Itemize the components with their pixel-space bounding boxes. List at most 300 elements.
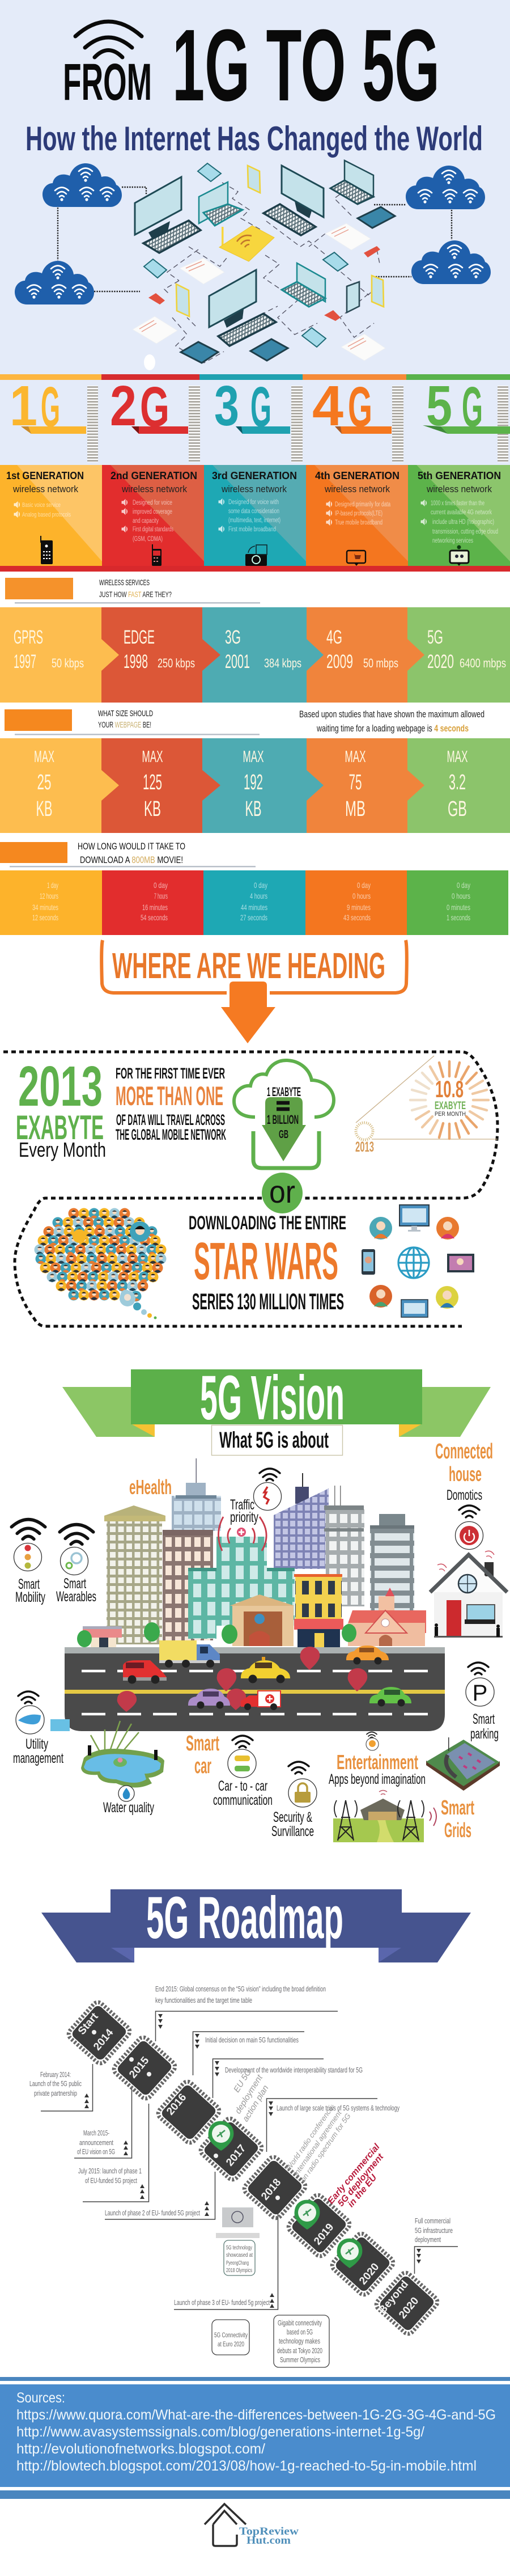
- card 1 text: wireless network: [12, 484, 78, 494]
- purple car: [188, 1689, 230, 1709]
- section header: webpage size: WHAT SIZE SHOULD: [98, 709, 153, 718]
- column 1 speeds: 1997: [14, 651, 36, 672]
- orange tab: [5, 578, 73, 599]
- milestone: February 2014: private partnership: [34, 2089, 77, 2097]
- generation logo 5G: 5: [426, 374, 452, 438]
- text block: more than one: FOR THE FIRST TIME EVER: [116, 1065, 225, 1082]
- milestone: initial decision: Initial decision on main 5G functionalities: [205, 2036, 299, 2044]
- rotated note: world radio conference: on radio spectrum for 5G: [299, 2112, 352, 2184]
- column 3 size: MAX: [243, 748, 264, 766]
- tower brown: [163, 1530, 213, 1640]
- column 3 size: KB: [245, 797, 262, 821]
- stat: 2013 exabyte: Every Month: [19, 1138, 106, 1161]
- item: connected house: house: [449, 1462, 482, 1486]
- person orange 2: [369, 1285, 392, 1308]
- column 3 time: 44 minutes: [241, 903, 267, 912]
- column 5 time: 1 seconds: [447, 913, 470, 922]
- red bar: [0, 566, 510, 572]
- parking lot: [426, 1737, 500, 1791]
- banner: 5G Roadmap: 5G Roadmap: [146, 1885, 343, 1951]
- badge: or: or: [269, 1174, 295, 1209]
- milestone: full commercial: [415, 2217, 453, 2244]
- reeds: [91, 1721, 139, 1750]
- item: smart parking: Smart: [473, 1711, 495, 1727]
- milestone: March 2015: [77, 2129, 115, 2156]
- green car: [369, 1687, 411, 1707]
- milestone: February 2014: Launch of the 5G public: [29, 2079, 82, 2088]
- chart: growth to 10.8 exabyte: 2013: [355, 1139, 374, 1155]
- road: [65, 1653, 445, 1731]
- column 1 speeds: 50 kbps: [52, 656, 84, 670]
- school: [345, 1588, 426, 1646]
- title: from: FROM: [63, 53, 152, 111]
- column 4 speeds: 4G: [326, 627, 342, 648]
- cloud outline: [234, 1060, 334, 1117]
- card 3 text: (multimedia, text, internet): [228, 517, 280, 524]
- item: smart car: Smart: [186, 1732, 219, 1756]
- stat: 2013 exabyte: EXABYTE: [16, 1109, 104, 1147]
- milestone: interoperability: Development of the worldwide interoperability standard for 5G: [225, 2066, 363, 2074]
- card 5 text: wireless network: [426, 484, 492, 494]
- generation logo 5G: G: [462, 375, 483, 439]
- icon: 3G device: [245, 545, 267, 566]
- item: utility management: management: [13, 1750, 63, 1766]
- farmhouse: [360, 1791, 405, 1820]
- card 3 text: wireless network: [221, 484, 287, 494]
- column 2 size: KB: [144, 797, 161, 821]
- item: entertainment: Entertainment: [337, 1750, 418, 1774]
- label box: what 5G is about: [212, 1426, 342, 1455]
- item: utility management: Utility: [26, 1736, 48, 1752]
- milestone: end 2015: [155, 1985, 326, 2004]
- generation logo 4G: 4: [312, 374, 343, 438]
- box: Euro 2020: [212, 2320, 249, 2355]
- column 1 size: KB: [36, 797, 52, 821]
- item: smart car: communication: [213, 1792, 273, 1808]
- card 5 text: 1000 x times faster than the: [431, 500, 484, 507]
- median: [65, 1690, 445, 1694]
- panel: sources: http://www.avasystemssignals.com/blog/generations-internet-1g-5g/: [16, 2424, 424, 2440]
- card 1 text: Basic voice service: [22, 502, 61, 509]
- illustration: road with cars: [65, 1640, 445, 1731]
- chart: growth to 10.8 exabyte: 10.8: [435, 1076, 464, 1102]
- illustration: smart city buildings: [77, 1458, 426, 1652]
- globe: [398, 1247, 429, 1278]
- logo: TopReviewHut: Hut.com: [246, 2535, 291, 2547]
- pond base: [81, 1749, 164, 1787]
- hard drives: [144, 163, 348, 347]
- icon: traffic priority: priority: [230, 1509, 258, 1525]
- icon: traffic priority: Traffic: [230, 1497, 254, 1513]
- cloud 1: [42, 163, 122, 207]
- card 3 text: First mobile broadband: [228, 526, 276, 533]
- chart: growth to 10.8 exabyte: EXABYTE: [435, 1100, 466, 1112]
- box: Tokyo 2020: Gigabit connectivity: [278, 2319, 322, 2327]
- person yellow: [436, 1286, 458, 1309]
- cloud 3: [406, 166, 485, 209]
- item: security and surveillance: [271, 1762, 317, 1839]
- lane dashes: [82, 1671, 428, 1714]
- column 1 time: 12 hours: [40, 891, 58, 900]
- column 1 time: [32, 881, 58, 922]
- table: download times: [0, 870, 508, 935]
- card 4 text: [315, 470, 400, 526]
- text block: more than one: [116, 1065, 226, 1143]
- box: Tokyo 2020: based on 5G: [287, 2328, 313, 2336]
- tower purple: [274, 1473, 329, 1569]
- tower teal: [188, 1537, 295, 1639]
- panel: generation stripes: [0, 374, 510, 380]
- chip labels: Start: [76, 2011, 101, 2037]
- chip labels: 2015: [127, 2054, 152, 2080]
- chip labels: 2016: [164, 2092, 189, 2117]
- chip labels: [76, 2011, 421, 2321]
- rotated note: EU 5G deployment action plan: EU 5G: [232, 2067, 253, 2094]
- generation logo 4G: G: [348, 375, 372, 439]
- generation logo 4G: [312, 374, 392, 439]
- rotated note: world radio conference: international agreement: [292, 2108, 343, 2177]
- house: [430, 1551, 507, 1638]
- documents: [133, 223, 385, 361]
- monitor: [400, 1205, 429, 1232]
- rotated note: early commercial deployment: in the EU: [346, 2173, 379, 2209]
- section header: webpage size: YOUR WEBPAGE BE!: [98, 720, 151, 730]
- column 5 speeds: 2020: [427, 651, 454, 672]
- column 4 speeds: 50 mbps: [363, 656, 398, 670]
- generation logo 1G: [10, 374, 86, 439]
- column 4 time: 43 seconds: [343, 913, 371, 922]
- column 4 time: [343, 881, 371, 922]
- item: security and surveillance: Security &: [273, 1809, 312, 1825]
- panel: sources: http://blowtech.blogspot.com/2013/08/how-1g-reached-to-5g-in-mobile.html: [16, 2458, 477, 2474]
- location pins: [117, 1647, 367, 1712]
- monitor 2: [264, 166, 324, 235]
- card 4 text: 4th GENERATION: [315, 470, 400, 481]
- left shop: [83, 1626, 122, 1652]
- chart: growth to 10.8 exabyte: [355, 1056, 498, 1155]
- document lines: [139, 227, 366, 349]
- dashed connectors: [164, 183, 380, 363]
- tower gray blue: [172, 1458, 221, 1531]
- heading: where are we heading: [101, 940, 407, 1043]
- illustration: crowd speech bubble: [34, 1208, 167, 1319]
- tower olive: [104, 1505, 165, 1644]
- stat: 2013 exabyte: [16, 1055, 106, 1161]
- panel: sources: http://evolutionofnetworks.blogspot.com/: [16, 2441, 265, 2457]
- stat: 2013 exabyte: 2013: [18, 1055, 103, 1118]
- card 5 text: 5th GENERATION: [418, 470, 501, 481]
- item: smart parking: P: [473, 1681, 487, 1706]
- column 5 time: [447, 881, 470, 922]
- column 3 speeds: 384 kbps: [264, 656, 301, 670]
- column 3 speeds: 2001: [225, 651, 250, 672]
- card 2 text: wireless network: [121, 484, 187, 494]
- person teal: [369, 1217, 392, 1240]
- text block: star wars: DOWNLOADING THE ENTIRE: [189, 1212, 346, 1234]
- box: PyeongChang: 5G technology: [226, 2244, 253, 2251]
- card 4 text: IP-based protocols(LTE): [335, 510, 382, 517]
- badge: or: [262, 1173, 303, 1213]
- arrow: [262, 1097, 306, 1161]
- item: smart car: car: [194, 1754, 211, 1778]
- banner: 5G Roadmap: [41, 1885, 471, 1962]
- column 4 time: 0 hours: [352, 891, 371, 900]
- ruler strips: [87, 386, 508, 462]
- column 2 time: 16 minutes: [142, 903, 168, 912]
- rule: [15, 734, 260, 735]
- milestone: end 2015: key functionalities and the target time table: [155, 1996, 252, 2004]
- text: THE GLOBAL MOBILE NETWORK: [116, 1126, 226, 1143]
- section header: download time: HOW LONG WOULD IT TAKE TO: [78, 841, 185, 852]
- icon: cloud download with exabyte: [234, 1060, 334, 1168]
- box: PyeongChang: showcased at: [226, 2252, 253, 2258]
- column 1 time: 34 minutes: [32, 903, 58, 912]
- column 5 size: MAX: [447, 748, 468, 766]
- card 3 text: some data consideration: [228, 508, 279, 515]
- ambulance: [241, 1691, 280, 1710]
- rotated note: EU 5G deployment action plan: [232, 2067, 271, 2124]
- icon: traffic priority: [230, 1469, 281, 1525]
- card 2 text: and capacity: [133, 518, 159, 524]
- rotated note: world radio conference: World radio conference:: [284, 2103, 336, 2172]
- timeline: roadmap: [29, 1985, 458, 2367]
- monitor 3: [209, 270, 276, 346]
- column 1 speeds: GPRS: [14, 627, 43, 648]
- laptop 3: [282, 263, 325, 307]
- rule: [10, 866, 256, 868]
- icon: cloud download with exabyte: GB: [279, 1128, 288, 1141]
- card 2 text: Designed for voice: [133, 500, 172, 506]
- item: smart grids: Smart: [441, 1796, 474, 1819]
- milestone: full commercial: Full commercial: [415, 2217, 450, 2225]
- icon: cloud download with exabyte: 1 EXABYTE: [267, 1085, 301, 1099]
- generation logo 2G: [110, 374, 188, 439]
- dotted connectors: [58, 187, 452, 291]
- rotated note: early commercial deployment: Early commercial: [326, 2142, 382, 2206]
- generation logo 3G: G: [250, 375, 271, 439]
- milestone: February 2014: February 2014:: [40, 2070, 71, 2079]
- item: smart car: [186, 1732, 273, 1808]
- column 1 speeds: [14, 627, 84, 672]
- sidewalk: [65, 1647, 445, 1654]
- column 5 time: 0 minutes: [447, 903, 470, 912]
- panel: sources: Sources:: [16, 2390, 65, 2406]
- column 4 size: [345, 748, 366, 821]
- item: utility management: [13, 1691, 70, 1766]
- orange tab: [0, 842, 67, 863]
- chip labels: 2014: [91, 2027, 116, 2053]
- column 5 size: 3.2: [449, 771, 466, 794]
- column 3 speeds: 3G: [225, 627, 241, 648]
- box: Euro 2020: 5G Connectivity: [214, 2331, 248, 2339]
- panel: header background: [0, 0, 510, 465]
- big burst: [410, 1061, 488, 1139]
- tower slate: [370, 1514, 414, 1613]
- text block: star wars: [189, 1212, 346, 1314]
- item: smart mobility: Mobility: [15, 1589, 45, 1605]
- milestone: phase 2: Launch of phase 2 of EU- funded 5G project: [105, 2209, 200, 2217]
- milestone: large scale trials: Launch of large scale trials of 5G systems & technology: [277, 2104, 400, 2112]
- item: entertainment: [329, 1732, 426, 1787]
- text: OF DATA WILL TRAVEL ACROSS: [116, 1111, 225, 1128]
- table: max webpage size: [0, 738, 510, 833]
- column 4 size: MB: [345, 797, 366, 821]
- chip labels: 2019: [312, 2222, 336, 2247]
- item: smart grids: [333, 1791, 474, 1842]
- milestone: March 2015: of EU vision on 5G: [77, 2147, 115, 2156]
- item: smart wearables: [56, 1525, 96, 1605]
- card 2 text: (GSM, CDMA): [133, 536, 163, 543]
- column 2 speeds: EDGE: [124, 627, 155, 648]
- taxi: [241, 1657, 290, 1683]
- water pipe: [50, 1719, 70, 1731]
- column 2 time: 0 day: [154, 881, 168, 890]
- box: Tokyo 2020: Summer Olympics: [280, 2355, 320, 2364]
- logo: TopReviewHut: [205, 2504, 299, 2547]
- card 1 text: [6, 470, 84, 518]
- monitor 1: [135, 177, 201, 253]
- icon: wifi title: [75, 22, 142, 57]
- milestone: February 2014: [29, 2070, 82, 2097]
- section header: download time: [0, 841, 256, 868]
- text: MORE THAN ONE: [116, 1081, 223, 1111]
- milestone: phase 3: Launch of phase 3 of EU- funded 5g project: [174, 2298, 270, 2307]
- tower gray: [324, 1486, 364, 1606]
- item: smart car: Car - to - car: [218, 1778, 267, 1794]
- logo: TopReviewHut: TopReview: [239, 2526, 299, 2537]
- box: PyeongChang: 2018 Olympics: [226, 2267, 252, 2274]
- banner: 5G Vision: [62, 1363, 491, 1437]
- title: [63, 9, 440, 122]
- column 4 time: 0 day: [357, 881, 371, 890]
- small burst: [356, 1123, 373, 1140]
- tablet pink: [447, 1254, 474, 1272]
- column 1 size: [34, 748, 54, 821]
- icon: 2G phone: [152, 544, 162, 566]
- item: smart wearables: Wearables: [56, 1589, 96, 1605]
- diagram: network of devices: [15, 160, 491, 370]
- icon: 4G shopping: [347, 551, 366, 566]
- milestone: full commercial: deployment: [415, 2235, 441, 2244]
- white dot: [144, 354, 155, 370]
- generation logo 2G: G: [140, 375, 169, 439]
- card 2 text: First digital standards: [133, 526, 173, 533]
- column 2 size: MAX: [142, 748, 163, 766]
- item: smart mobility: Smart: [18, 1576, 40, 1592]
- box: Tokyo 2020: debuts at Tokyo 2020: [277, 2346, 322, 2355]
- chip labels: 2020: [357, 2261, 381, 2287]
- column 1 size: MAX: [34, 748, 54, 766]
- card 2 text: improved coverage: [133, 509, 172, 515]
- arrow: [221, 982, 275, 1043]
- truck: [159, 1640, 220, 1668]
- laptop screen: [401, 1300, 428, 1317]
- column 5 speeds: [427, 627, 506, 672]
- icons: connected people and devices: [362, 1205, 474, 1317]
- generation logo 1G: 1: [10, 374, 37, 438]
- milestone: end 2015: End 2015: Global consensus on the “5G vision” including the broad definition: [155, 1985, 326, 1993]
- card 4 text: wireless network: [324, 484, 390, 494]
- milestone: full commercial: 5G infrastructure: [415, 2226, 453, 2235]
- box: Tokyo 2020: technology makes: [279, 2337, 320, 2345]
- column 4 speeds: 2009: [326, 651, 353, 672]
- chip labels: Beyond: [376, 2278, 411, 2316]
- column 4 time: 9 minutes: [347, 903, 371, 912]
- box: PyeongChang: PyeongChang: [226, 2260, 249, 2266]
- chart: growth to 10.8 exabyte: PER MONTH: [435, 1111, 466, 1118]
- generation logo 2G: 2: [110, 374, 137, 438]
- panel: generation cards: [0, 465, 510, 572]
- item: security and surveillance: Survillance: [271, 1824, 314, 1839]
- note: maximum waiting time: [299, 709, 484, 734]
- tray: [253, 1131, 319, 1168]
- icon: cloud download with exabyte: 1 BILLION: [267, 1113, 299, 1127]
- card 5 text: networking services: [432, 538, 473, 544]
- column 2 time: [141, 881, 168, 922]
- item: smart grids: Grids: [444, 1818, 471, 1842]
- icon: 5G video: [450, 545, 469, 566]
- column 5 time: 0 day: [457, 881, 470, 890]
- item: entertainment: Apps beyond imagination: [329, 1771, 426, 1787]
- column 4 speeds: [326, 627, 398, 672]
- rotated note: EU 5G deployment action plan: action plan: [241, 2083, 271, 2124]
- column 5 time: 0 hours: [452, 891, 470, 900]
- table: wireless speeds: [0, 607, 510, 703]
- panel: sources: https://www.quora.com/What-are-the-differences-between-1G-2G-3G-4G-and-5G: [16, 2407, 496, 2423]
- card 3 text: 3rd GENERATION: [212, 470, 297, 481]
- section header: wireless services: WIRELESS SERVICES: [99, 578, 150, 587]
- phones: [176, 166, 384, 316]
- equals: [277, 1103, 290, 1109]
- bracket: [101, 940, 407, 993]
- item: smart parking: [426, 1663, 500, 1791]
- chip labels: 2018: [259, 2177, 283, 2202]
- laptop 1: [330, 160, 373, 204]
- item: smart wearables: Smart: [63, 1576, 86, 1592]
- bank: [230, 1594, 295, 1646]
- banner: 5G Vision: 5G Vision: [200, 1363, 345, 1433]
- cloud 4: [411, 240, 491, 284]
- card 3 text: Designed for voice with: [228, 499, 279, 506]
- box: Tokyo 2020: [274, 2315, 329, 2367]
- column 3 speeds: [225, 627, 301, 672]
- milestone: July 2015: July 2015: launch of phase 1: [78, 2167, 142, 2175]
- column 3 time: 27 seconds: [240, 913, 267, 922]
- column 3 time: [240, 881, 267, 922]
- person orange: [436, 1217, 459, 1240]
- pylons: [338, 1800, 419, 1841]
- generation logo 5G: [423, 374, 510, 439]
- section header: wireless services: JUST HOW FAST ARE THEY?: [99, 590, 172, 599]
- card 4 text: True mobile broadband: [335, 519, 382, 526]
- item: water quality pond: Water quality: [103, 1800, 154, 1816]
- column 4 size: MAX: [345, 748, 366, 766]
- laptop 2: [199, 182, 243, 226]
- icon: laptop olympic: [216, 2207, 260, 2238]
- column 1 time: 12 seconds: [32, 913, 58, 922]
- timeline connector lines: [41, 2011, 458, 2309]
- cloud 2: [15, 261, 94, 304]
- chip dots: [92, 2030, 280, 2200]
- orange car: [346, 1646, 389, 1665]
- trees: [77, 1622, 356, 1647]
- rule: [15, 602, 260, 603]
- column 4 size: 75: [349, 771, 362, 794]
- chips: [66, 2000, 132, 2066]
- milestone: March 2015: March 2015-: [83, 2129, 109, 2137]
- generation logo 3G: 3: [214, 374, 239, 438]
- column 2 time: 54 seconds: [141, 913, 168, 922]
